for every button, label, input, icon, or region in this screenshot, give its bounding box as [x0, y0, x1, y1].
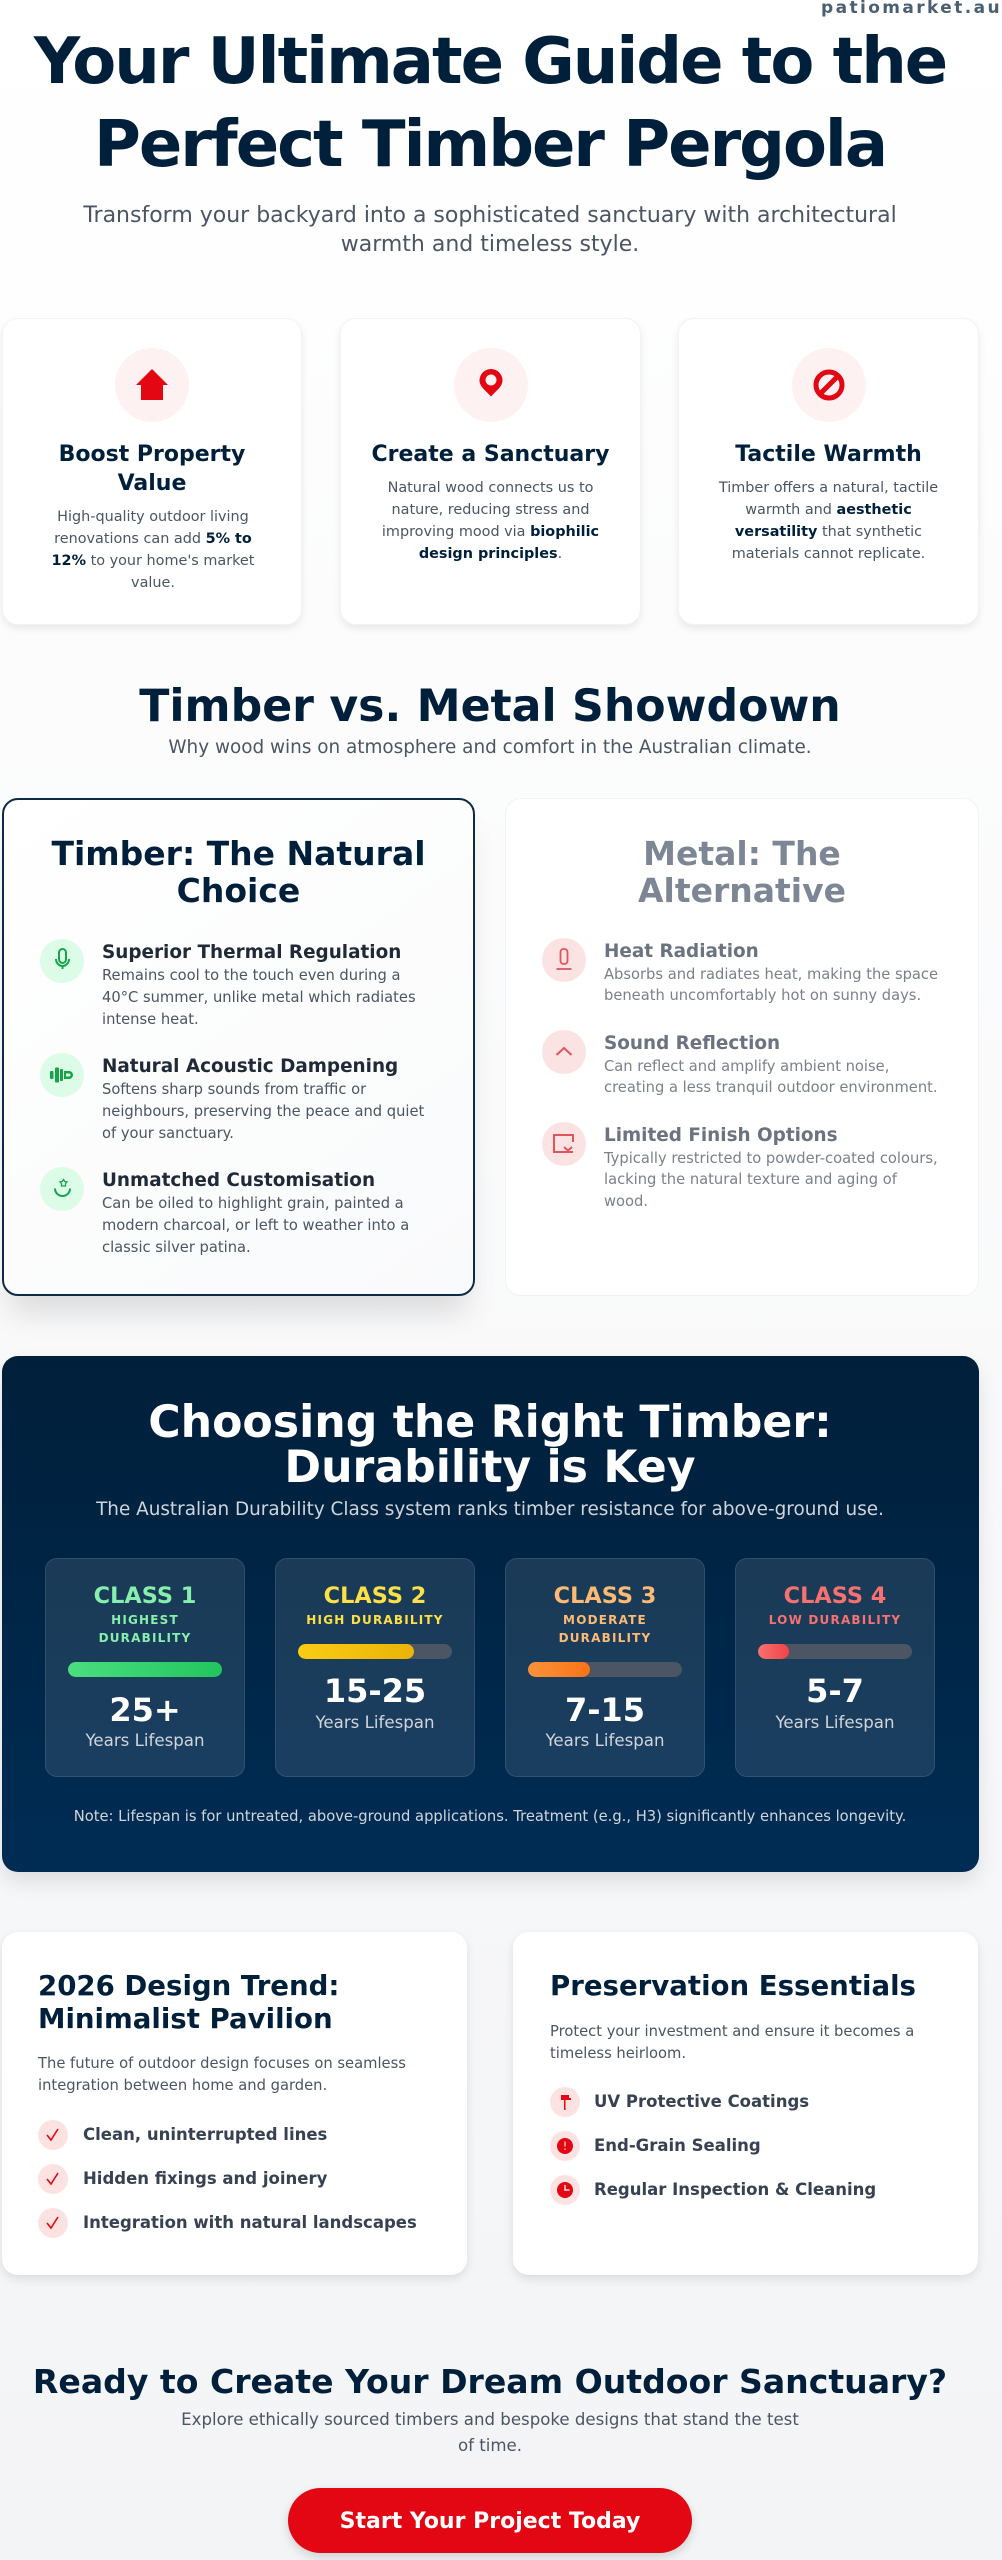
section heading: showdown: Timber vs. Metal Showdown — [139, 680, 841, 732]
card heading: Create a Sanctuary — [372, 442, 609, 467]
class 3 card — [505, 1558, 705, 1777]
lifespan label: Years Lifespan — [85, 1731, 205, 1750]
card text: improving mood via biophilic — [382, 524, 599, 540]
list text: UV Protective Coatings — [594, 2092, 809, 2111]
list: trend points — [38, 2120, 417, 2238]
card text: Natural wood connects us to — [388, 480, 593, 496]
durability label: HIGHEST — [111, 1613, 179, 1627]
call to action button: Start Your Project Today — [340, 2509, 640, 2534]
durability bar — [68, 1662, 222, 1677]
trend heading — [38, 1969, 339, 2035]
durability note: Note: Lifespan is for untreated, above-ground applications. Treatment (e.g., H3) significantly enhances longevity. — [74, 1808, 906, 1825]
panel: preservation — [513, 1932, 978, 2275]
lifespan label: Years Lifespan — [315, 1713, 435, 1732]
metal item: sound — [542, 1030, 938, 1096]
panel: timber — [2, 798, 475, 1296]
item description — [102, 1081, 424, 1142]
trend text: The future of outdoor design focuses on seamless — [38, 2055, 406, 2072]
timber item: acoustic — [40, 1053, 424, 1142]
durability label: MODERATE — [563, 1613, 647, 1627]
card text: Timber offers a natural, tactile — [719, 480, 938, 496]
list text: Hidden fixings and joinery — [83, 2169, 327, 2188]
durability label — [559, 1613, 651, 1645]
card text: High-quality outdoor living — [57, 509, 249, 525]
lifespan label: Years Lifespan — [545, 1731, 665, 1750]
item text: Heat Radiation — [604, 941, 759, 962]
card text: warmth and aesthetic — [745, 502, 912, 518]
subtitle: warmth and timeless style. — [341, 232, 639, 257]
durability label: LOW DURABILITY — [769, 1613, 901, 1627]
list text: Clean, uninterrupted lines — [83, 2125, 327, 2144]
durability bar — [298, 1644, 452, 1659]
icon: smile with star — [40, 1167, 84, 1211]
metal heading: Alternative — [638, 871, 846, 910]
call to action text: of time. — [458, 2436, 522, 2455]
item text: Limited Finish Options — [604, 1125, 838, 1146]
subtitle: Transform your backyard into a sophisticated sanctuary with architectural — [83, 202, 897, 228]
lifespan value: 25+ — [109, 1691, 181, 1729]
trend heading: 2026 Design Trend: — [38, 1969, 339, 2002]
subtitle — [83, 202, 897, 257]
icon: location pin — [454, 348, 528, 422]
card text: nature, reducing stress and — [392, 502, 590, 518]
item description: Typically restricted to powder-coated colours, — [604, 1150, 938, 1166]
title: Your Ultimate Guide to the — [34, 25, 946, 99]
lifespan value: 5-7 — [806, 1672, 864, 1710]
item description: intense heat. — [102, 1011, 199, 1028]
item description: lacking the natural texture and aging of — [604, 1171, 897, 1188]
title — [33, 25, 946, 182]
item description — [604, 966, 938, 1004]
durability heading: Choosing the Right Timber: — [148, 1397, 832, 1448]
durability label: DURABILITY — [559, 1631, 651, 1645]
item description: wood. — [604, 1193, 648, 1210]
durability heading — [148, 1397, 832, 1493]
metal item: heat — [542, 938, 938, 1004]
class label: CLASS 1 — [94, 1583, 196, 1609]
class 1 card — [45, 1558, 245, 1777]
durability label: HIGH DURABILITY — [306, 1613, 444, 1627]
class 4 card — [735, 1558, 935, 1777]
card text: 12% to your home's market — [52, 553, 254, 569]
item description — [102, 967, 416, 1028]
item description: beneath uncomfortably hot on sunny days. — [604, 987, 921, 1004]
call to action text — [181, 2410, 799, 2455]
card text: materials cannot replicate. — [732, 546, 925, 562]
panel: tactile warmth — [678, 318, 979, 625]
item description: creating a less tranquil outdoor environment. — [604, 1079, 938, 1096]
icon: thermometer — [40, 939, 84, 983]
durability label — [99, 1613, 191, 1645]
class 2 card — [275, 1558, 475, 1777]
card text: value. — [131, 575, 175, 591]
durability label: DURABILITY — [99, 1631, 191, 1645]
lifespan value: 7-15 — [565, 1691, 645, 1729]
card heading: Tactile Warmth — [735, 442, 922, 467]
item description — [102, 1195, 409, 1256]
preservation text — [550, 2022, 914, 2062]
item description: Can be oiled to highlight grain, painted a — [102, 1195, 404, 1212]
class label: CLASS 4 — [784, 1583, 886, 1609]
card text — [382, 480, 599, 562]
call to action text: Explore ethically sourced timbers and bespoke designs that stand the test — [181, 2410, 799, 2429]
item description: Can reflect and amplify ambient noise, — [604, 1058, 889, 1074]
card heading — [59, 442, 245, 496]
item description: of your sanctuary. — [102, 1125, 234, 1142]
item text: Natural Acoustic Dampening — [102, 1056, 398, 1077]
item text: Superior Thermal Regulation — [102, 942, 401, 963]
card heading: Value — [118, 471, 186, 496]
durability bar — [758, 1644, 912, 1659]
icon: prohibited — [792, 348, 866, 422]
card text: renovations can add 5% to — [54, 531, 252, 547]
preservation heading: Preservation Essentials — [550, 1969, 916, 2002]
trend text — [38, 2055, 406, 2094]
icon: heat — [542, 938, 586, 982]
item description — [604, 1150, 938, 1210]
panel: design trend — [2, 1932, 467, 2275]
item description: Softens sharp sounds from traffic or — [102, 1081, 366, 1098]
durability subtitle: The Australian Durability Class system ranks timber resistance for above-ground use. — [96, 1498, 884, 1520]
preservation text: Protect your investment and ensure it becomes a — [550, 2022, 914, 2040]
lifespan value: 15-25 — [324, 1672, 426, 1710]
call to action button — [288, 2488, 692, 2553]
timber item: thermal — [40, 939, 416, 1028]
icon: check — [38, 2208, 68, 2238]
icon: check — [38, 2164, 68, 2194]
icon: house — [115, 348, 189, 422]
item description: neighbours, preserving the peace and quiet — [102, 1103, 424, 1120]
icon: clock — [550, 2175, 580, 2205]
list text: End-Grain Sealing — [594, 2136, 761, 2155]
item description: modern charcoal, or left to weather into a — [102, 1217, 409, 1234]
metal heading: Metal: The — [643, 834, 841, 873]
call to action heading: Ready to Create Your Dream Outdoor Sanctuary? — [33, 2362, 947, 2401]
timber heading — [51, 834, 426, 910]
icon: alert — [550, 2131, 580, 2161]
list: preservation points — [550, 2087, 876, 2205]
icon: check — [38, 2120, 68, 2150]
timber heading: Timber: The Natural — [51, 834, 426, 873]
panel: create a sanctuary — [340, 318, 641, 625]
metal item: finish — [542, 1122, 938, 1210]
preservation text: timeless heirloom. — [550, 2045, 686, 2062]
card text: design principles. — [419, 546, 562, 562]
icon: brush — [550, 2087, 580, 2117]
item text: Sound Reflection — [604, 1033, 780, 1054]
panel: boost property value — [2, 318, 302, 625]
list text: Regular Inspection & Cleaning — [594, 2180, 876, 2199]
card text: versatility that synthetic — [735, 524, 922, 540]
item description — [604, 1058, 938, 1096]
class label: CLASS 3 — [554, 1583, 656, 1609]
metal heading — [638, 834, 846, 910]
item description: classic silver patina. — [102, 1239, 251, 1256]
durability bar — [528, 1662, 682, 1677]
class label: CLASS 2 — [324, 1583, 426, 1609]
panel: durability — [2, 1356, 979, 1872]
trend heading: Minimalist Pavilion — [38, 2002, 333, 2035]
title: Perfect Timber Pergola — [94, 108, 886, 182]
trend text: integration between home and garden. — [38, 2077, 327, 2094]
icon: sound waves — [40, 1053, 84, 1097]
lifespan label: Years Lifespan — [775, 1713, 895, 1732]
item text: Unmatched Customisation — [102, 1170, 375, 1191]
card text — [718, 480, 938, 562]
item description: 40°C summer, unlike metal which radiates — [102, 989, 416, 1006]
icon: frame — [542, 1122, 586, 1166]
card heading: Boost Property — [59, 442, 245, 467]
durability heading: Durability is Key — [284, 1442, 696, 1493]
icon: chevron — [542, 1030, 586, 1074]
timber item: customisation — [40, 1167, 409, 1256]
item description: Absorbs and radiates heat, making the space — [604, 966, 938, 982]
card text — [52, 509, 254, 591]
section subtitle: showdown: Why wood wins on atmosphere and comfort in the Australian climate. — [168, 737, 812, 758]
item description: Remains cool to the touch even during a — [102, 967, 400, 984]
panel: metal — [505, 798, 979, 1296]
list text: Integration with natural landscapes — [83, 2213, 417, 2232]
timber heading: Choice — [177, 871, 300, 910]
